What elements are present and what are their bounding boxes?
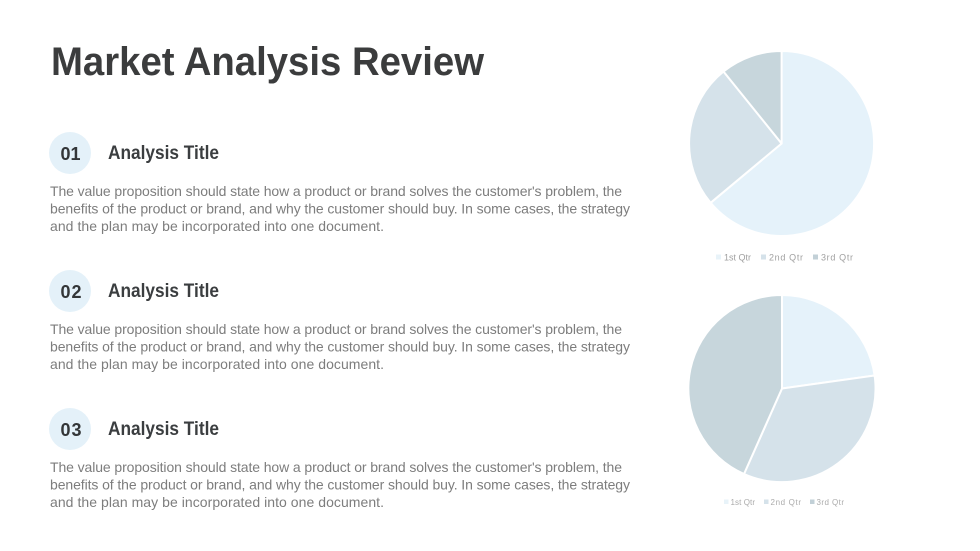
text block: analysis 03: benefits of the product or brand, and why the customer should buy. In some cases, the strategy bbox=[50, 476, 630, 492]
heading: analysis 03: Analysis Title bbox=[108, 419, 219, 440]
icon: number badge 01: 01 bbox=[60, 144, 80, 164]
legend: bottom pie: 1st Qtr bbox=[730, 498, 755, 507]
icon: number badge 02 bbox=[49, 270, 91, 312]
text block: analysis 01: benefits of the product or brand, and why the customer should buy. In some cases, the strategy bbox=[50, 200, 630, 216]
legend: bottom pie: 3rd Qtr bbox=[816, 498, 844, 507]
text block: analysis 02: and the plan may be incorporated into one document. bbox=[50, 356, 384, 372]
text block: analysis 03 bbox=[50, 459, 630, 510]
text block: analysis 02: The value proposition should state how a product or brand solves the customer's problem, the bbox=[50, 321, 622, 337]
icon: number badge 01 bbox=[49, 132, 91, 174]
text block: analysis 02: benefits of the product or brand, and why the customer should buy. In some cases, the strategy bbox=[50, 338, 630, 354]
legend: top pie bbox=[716, 252, 853, 262]
legend: top pie: 1st Qtr bbox=[724, 252, 751, 262]
legend: bottom pie: 2nd Qtr bbox=[770, 498, 801, 507]
text block: analysis 02 bbox=[50, 321, 630, 372]
legend: bottom pie bbox=[724, 498, 844, 507]
title: Market Analysis Review bbox=[51, 40, 485, 84]
heading: analysis 01: Analysis Title bbox=[108, 143, 219, 164]
text block: analysis 01: and the plan may be incorporated into one document. bbox=[50, 218, 384, 234]
chart: bottom pie bbox=[688, 295, 876, 482]
panel: analysis 03 bbox=[49, 408, 630, 510]
text block: analysis 03: and the plan may be incorporated into one document. bbox=[50, 494, 384, 510]
text block: analysis 01: The value proposition should state how a product or brand solves the customer's problem, the bbox=[50, 183, 622, 199]
panel: analysis 01 bbox=[49, 132, 630, 234]
legend: top pie: 3rd Qtr bbox=[821, 252, 853, 262]
chart: top pie bbox=[689, 51, 874, 236]
legend: top pie: 2nd Qtr bbox=[769, 252, 803, 262]
heading: analysis 02: Analysis Title bbox=[108, 281, 219, 302]
panel: analysis 02 bbox=[49, 270, 630, 372]
text block: analysis 01 bbox=[50, 183, 630, 234]
text block: analysis 03: The value proposition should state how a product or brand solves the customer's problem, the bbox=[50, 459, 622, 475]
icon: number badge 02: 02 bbox=[60, 282, 82, 302]
icon: number badge 03: 03 bbox=[60, 420, 82, 440]
icon: number badge 03 bbox=[49, 408, 91, 450]
